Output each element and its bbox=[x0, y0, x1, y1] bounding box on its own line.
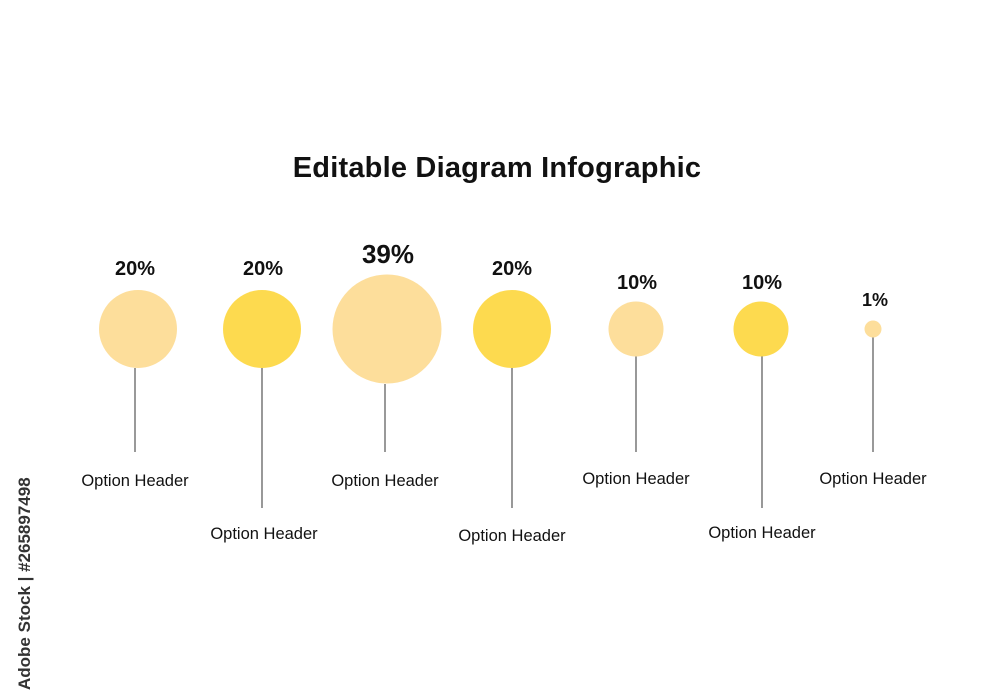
item 5: Option Header bbox=[582, 470, 690, 488]
item 6 bbox=[708, 272, 816, 542]
title: Editable Diagram Infographic bbox=[293, 152, 701, 184]
item 3: 39% bbox=[362, 239, 414, 269]
item 4 bbox=[458, 258, 566, 545]
item 1: Option Header bbox=[81, 472, 189, 490]
item 2 bbox=[210, 258, 318, 543]
item 6: Option Header bbox=[708, 524, 816, 542]
item 7 bbox=[819, 290, 927, 488]
item 1 bbox=[81, 258, 189, 490]
watermark side text: Adobe Stock | #265897498 bbox=[15, 477, 34, 690]
item 7: Option Header bbox=[819, 470, 927, 488]
item 5: 10% bbox=[617, 272, 657, 294]
item 3: Option Header bbox=[331, 472, 439, 490]
item 5 bbox=[582, 272, 690, 488]
item 2: Option Header bbox=[210, 525, 318, 543]
item 4: 20% bbox=[492, 258, 532, 280]
item 4: Option Header bbox=[458, 527, 566, 545]
item 7: 1% bbox=[862, 290, 888, 310]
item 3 bbox=[331, 239, 442, 490]
item 1: 20% bbox=[115, 258, 155, 280]
item 6: 10% bbox=[742, 272, 782, 294]
item 2: 20% bbox=[243, 258, 283, 280]
